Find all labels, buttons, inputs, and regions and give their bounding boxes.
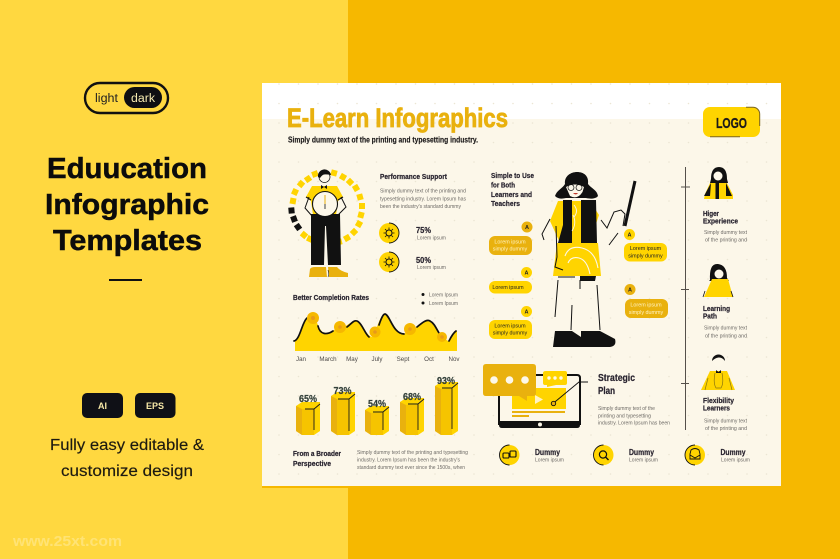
block: from a broader perspective: Perspective bbox=[293, 459, 331, 468]
callout: left 1 bbox=[489, 222, 532, 255]
callout: right 2: A bbox=[628, 288, 632, 294]
block: from a broader perspective bbox=[293, 449, 468, 471]
area chart: July bbox=[371, 356, 383, 363]
text: learning path: Path bbox=[703, 312, 717, 320]
area chart: Oct bbox=[424, 356, 434, 363]
callout: left 3: Lorem ipsum bbox=[494, 324, 526, 330]
block: strategic plan: printing and typesetting bbox=[598, 414, 651, 420]
bar 54% bbox=[365, 399, 389, 435]
head bbox=[319, 172, 330, 182]
arms bbox=[542, 210, 625, 270]
block: strategic plan: Strategic bbox=[598, 373, 635, 384]
block: from a broader perspective: Simply dummy text of the printing and typesetting bbox=[357, 450, 468, 456]
text: flexibility learners: Simply dummy text bbox=[704, 418, 747, 424]
bar 73%: 73% bbox=[334, 386, 352, 397]
area chart: Sept bbox=[397, 356, 410, 363]
block: performance support: Performance Support bbox=[380, 172, 448, 181]
block: performance support: Simply dummy text of the printing and bbox=[380, 188, 466, 194]
callout: left 3: simply dummy bbox=[493, 330, 528, 336]
block: strategic plan: Plan bbox=[598, 386, 615, 397]
heading: simple to use: Teachers bbox=[491, 199, 520, 208]
callout: left 3 bbox=[489, 306, 532, 339]
watermark: www.25xt.com bbox=[12, 533, 122, 550]
text: flexibility learners: Flexibility bbox=[703, 396, 734, 405]
callout: left 1: simply dummy bbox=[493, 246, 528, 252]
block: performance support: typesetting industry. Lorem Ipsum has bbox=[380, 196, 466, 202]
area chart: March bbox=[319, 356, 337, 363]
stat: 75%: Lorem ipsum bbox=[417, 236, 447, 242]
panel: infographic sheet bbox=[262, 83, 783, 488]
text: dummy 1: Lorem ipsum bbox=[535, 458, 565, 464]
skirt bbox=[553, 243, 601, 276]
callout: left 2: A bbox=[525, 270, 529, 276]
toggle: light / dark bbox=[85, 83, 168, 113]
legend: Lorem Ipsum bbox=[429, 301, 459, 307]
bar chart: 3D percent columns bbox=[296, 376, 458, 435]
shirt swirl bbox=[572, 205, 576, 231]
bar 73% bbox=[331, 386, 355, 435]
block: strategic plan: Simply dummy text of the bbox=[598, 406, 655, 412]
badge: AI bbox=[82, 393, 123, 418]
block: from a broader perspective: industry. Lorem Ipsum has been the industry's bbox=[357, 458, 460, 464]
icon: sun stat 75% bbox=[379, 223, 399, 243]
toggle: light / dark: dark bbox=[131, 93, 155, 105]
heading: simple to use bbox=[491, 171, 534, 208]
heading: template title bbox=[45, 153, 209, 257]
text: flexibility learners bbox=[703, 396, 747, 432]
legend bbox=[422, 292, 459, 307]
bar 93% bbox=[435, 376, 458, 435]
logo badge bbox=[703, 107, 760, 137]
divider under title bbox=[109, 279, 142, 281]
icon: dummy 1 bbox=[500, 445, 520, 465]
text: editable note bbox=[50, 437, 205, 480]
heading: simple to use: for Both bbox=[491, 180, 515, 190]
text: dummy 2: Dummy bbox=[629, 448, 654, 457]
callout: left 1: Lorem ipsum bbox=[494, 240, 526, 246]
bar 93%: 93% bbox=[437, 376, 455, 387]
heading: simple to use: Learners and bbox=[491, 190, 532, 199]
subtitle: Simply dummy text of the printing and typesetting industry. bbox=[288, 136, 478, 144]
heading: better completion rates: Better Completion Rates bbox=[293, 293, 369, 302]
callout: left 3: A bbox=[525, 310, 529, 316]
small chat bubble bbox=[543, 371, 567, 387]
text: dummy 3: Dummy bbox=[720, 448, 746, 457]
illustration: teacher with pointer bbox=[542, 172, 635, 347]
block: strategic plan: industry. Lorem Ipsum has been bbox=[598, 420, 670, 426]
text: dummy 2 bbox=[629, 448, 659, 464]
background: right amber panel bbox=[348, 0, 840, 559]
trousers bbox=[311, 214, 341, 265]
callout: right 2 bbox=[624, 284, 668, 318]
icon: dummy 2 bbox=[594, 445, 614, 465]
shoes bbox=[309, 267, 348, 277]
text: dummy 1: Dummy bbox=[535, 448, 560, 457]
bar 54%: 54% bbox=[368, 399, 386, 410]
stat: 50%: 50% bbox=[416, 255, 431, 265]
block: strategic plan bbox=[598, 373, 670, 426]
illustration: tablet with video and chat bubbles bbox=[483, 364, 588, 428]
text: learning path bbox=[703, 304, 747, 340]
text: dummy 1 bbox=[535, 448, 565, 464]
text: higer experience: Experience bbox=[703, 216, 738, 226]
text: learning path: of the printing and bbox=[705, 334, 747, 340]
block: from a broader perspective: From a Broader bbox=[293, 449, 341, 458]
tablet bbox=[499, 375, 580, 425]
callout: left 2 bbox=[489, 267, 532, 294]
text: dummy 3 bbox=[720, 448, 751, 464]
stat: 50% bbox=[416, 255, 447, 271]
heading: template title: Templates bbox=[53, 225, 202, 257]
text: flexibility learners: of the printing and bbox=[705, 426, 747, 432]
bar 68% bbox=[400, 392, 424, 435]
badge: EPS bbox=[135, 393, 176, 418]
big chat bubble bbox=[483, 364, 536, 401]
text: higer experience: Higer bbox=[703, 209, 719, 218]
bar 65%: 65% bbox=[299, 394, 317, 405]
pointer line bbox=[553, 382, 588, 404]
text: editable note: Fully easy editable & bbox=[50, 437, 205, 454]
title: E-Learn Infographics bbox=[287, 103, 508, 133]
badge: AI: AI bbox=[98, 401, 107, 411]
text: higer experience: of the printing and bbox=[705, 238, 747, 244]
background: left yellow panel bbox=[0, 0, 348, 559]
legend: Lorem Ipsum bbox=[429, 292, 459, 298]
screen bbox=[512, 388, 566, 409]
callout: right 1 bbox=[624, 229, 667, 262]
text: flexibility learners: Learners bbox=[703, 404, 730, 412]
text: learning path: Learning bbox=[703, 304, 730, 313]
shirt bbox=[306, 186, 343, 215]
text: editable note: customize design bbox=[61, 463, 193, 480]
heading: simple to use: Simple to Use bbox=[491, 171, 534, 180]
timeline bbox=[681, 167, 690, 430]
icon: sun stat 50% bbox=[379, 252, 399, 272]
icon: dummy 3 bbox=[685, 445, 705, 465]
hair bbox=[555, 172, 598, 199]
stat: 50%: Lorem ipsum bbox=[417, 265, 447, 271]
shirt bbox=[550, 201, 599, 243]
callout: right 2: simply dummy bbox=[629, 310, 664, 316]
block: performance support bbox=[380, 172, 466, 210]
text: dummy 3: Lorem ipsum bbox=[721, 458, 751, 464]
text: higer experience: Simply dummy text bbox=[704, 230, 747, 236]
heading: template title: Infographic bbox=[45, 189, 209, 221]
bar 65% bbox=[296, 394, 320, 435]
callout: right 1: A bbox=[628, 232, 632, 238]
toggle: light / dark: light bbox=[95, 93, 119, 105]
block: performance support: been the industry's standard dummy bbox=[380, 204, 461, 210]
bar 68%: 68% bbox=[403, 392, 421, 403]
block: from a broader perspective: standard dummy text ever since the 1500s, when bbox=[357, 465, 465, 471]
illustration: man with clock bbox=[288, 169, 365, 277]
stat: 75% bbox=[416, 225, 447, 242]
illustration: learning path person bbox=[703, 264, 733, 297]
text: dummy 2: Lorem ipsum bbox=[629, 458, 659, 464]
vest bbox=[558, 200, 597, 243]
heading: template title: Eduucation bbox=[47, 153, 207, 185]
callout: right 1: Lorem ipsum bbox=[630, 246, 662, 252]
legs bbox=[555, 280, 600, 330]
area chart bbox=[294, 312, 460, 363]
face bbox=[566, 184, 584, 197]
area chart: Nov bbox=[448, 356, 460, 363]
stat: 75%: 75% bbox=[416, 225, 431, 235]
callout: left 2: Lorem ipsum bbox=[492, 285, 524, 291]
illustration: higher experience person bbox=[704, 167, 733, 199]
badge: EPS: EPS bbox=[146, 401, 164, 411]
clock bbox=[312, 192, 338, 216]
area chart: May bbox=[346, 356, 359, 363]
callout: right 2: Lorem ipsum bbox=[630, 302, 662, 308]
callout: left 1: A bbox=[525, 225, 529, 231]
callout: right 1: simply dummy bbox=[628, 254, 663, 260]
shoes bbox=[553, 331, 615, 347]
logo badge: LOGO bbox=[716, 115, 747, 132]
text: higer experience bbox=[703, 209, 747, 244]
illustration: flexibility learners person bbox=[701, 354, 735, 390]
pointer bbox=[625, 181, 635, 226]
progress ring bbox=[290, 169, 365, 246]
text: learning path: Simply dummy text bbox=[704, 326, 747, 332]
area chart: Jan bbox=[296, 356, 307, 363]
